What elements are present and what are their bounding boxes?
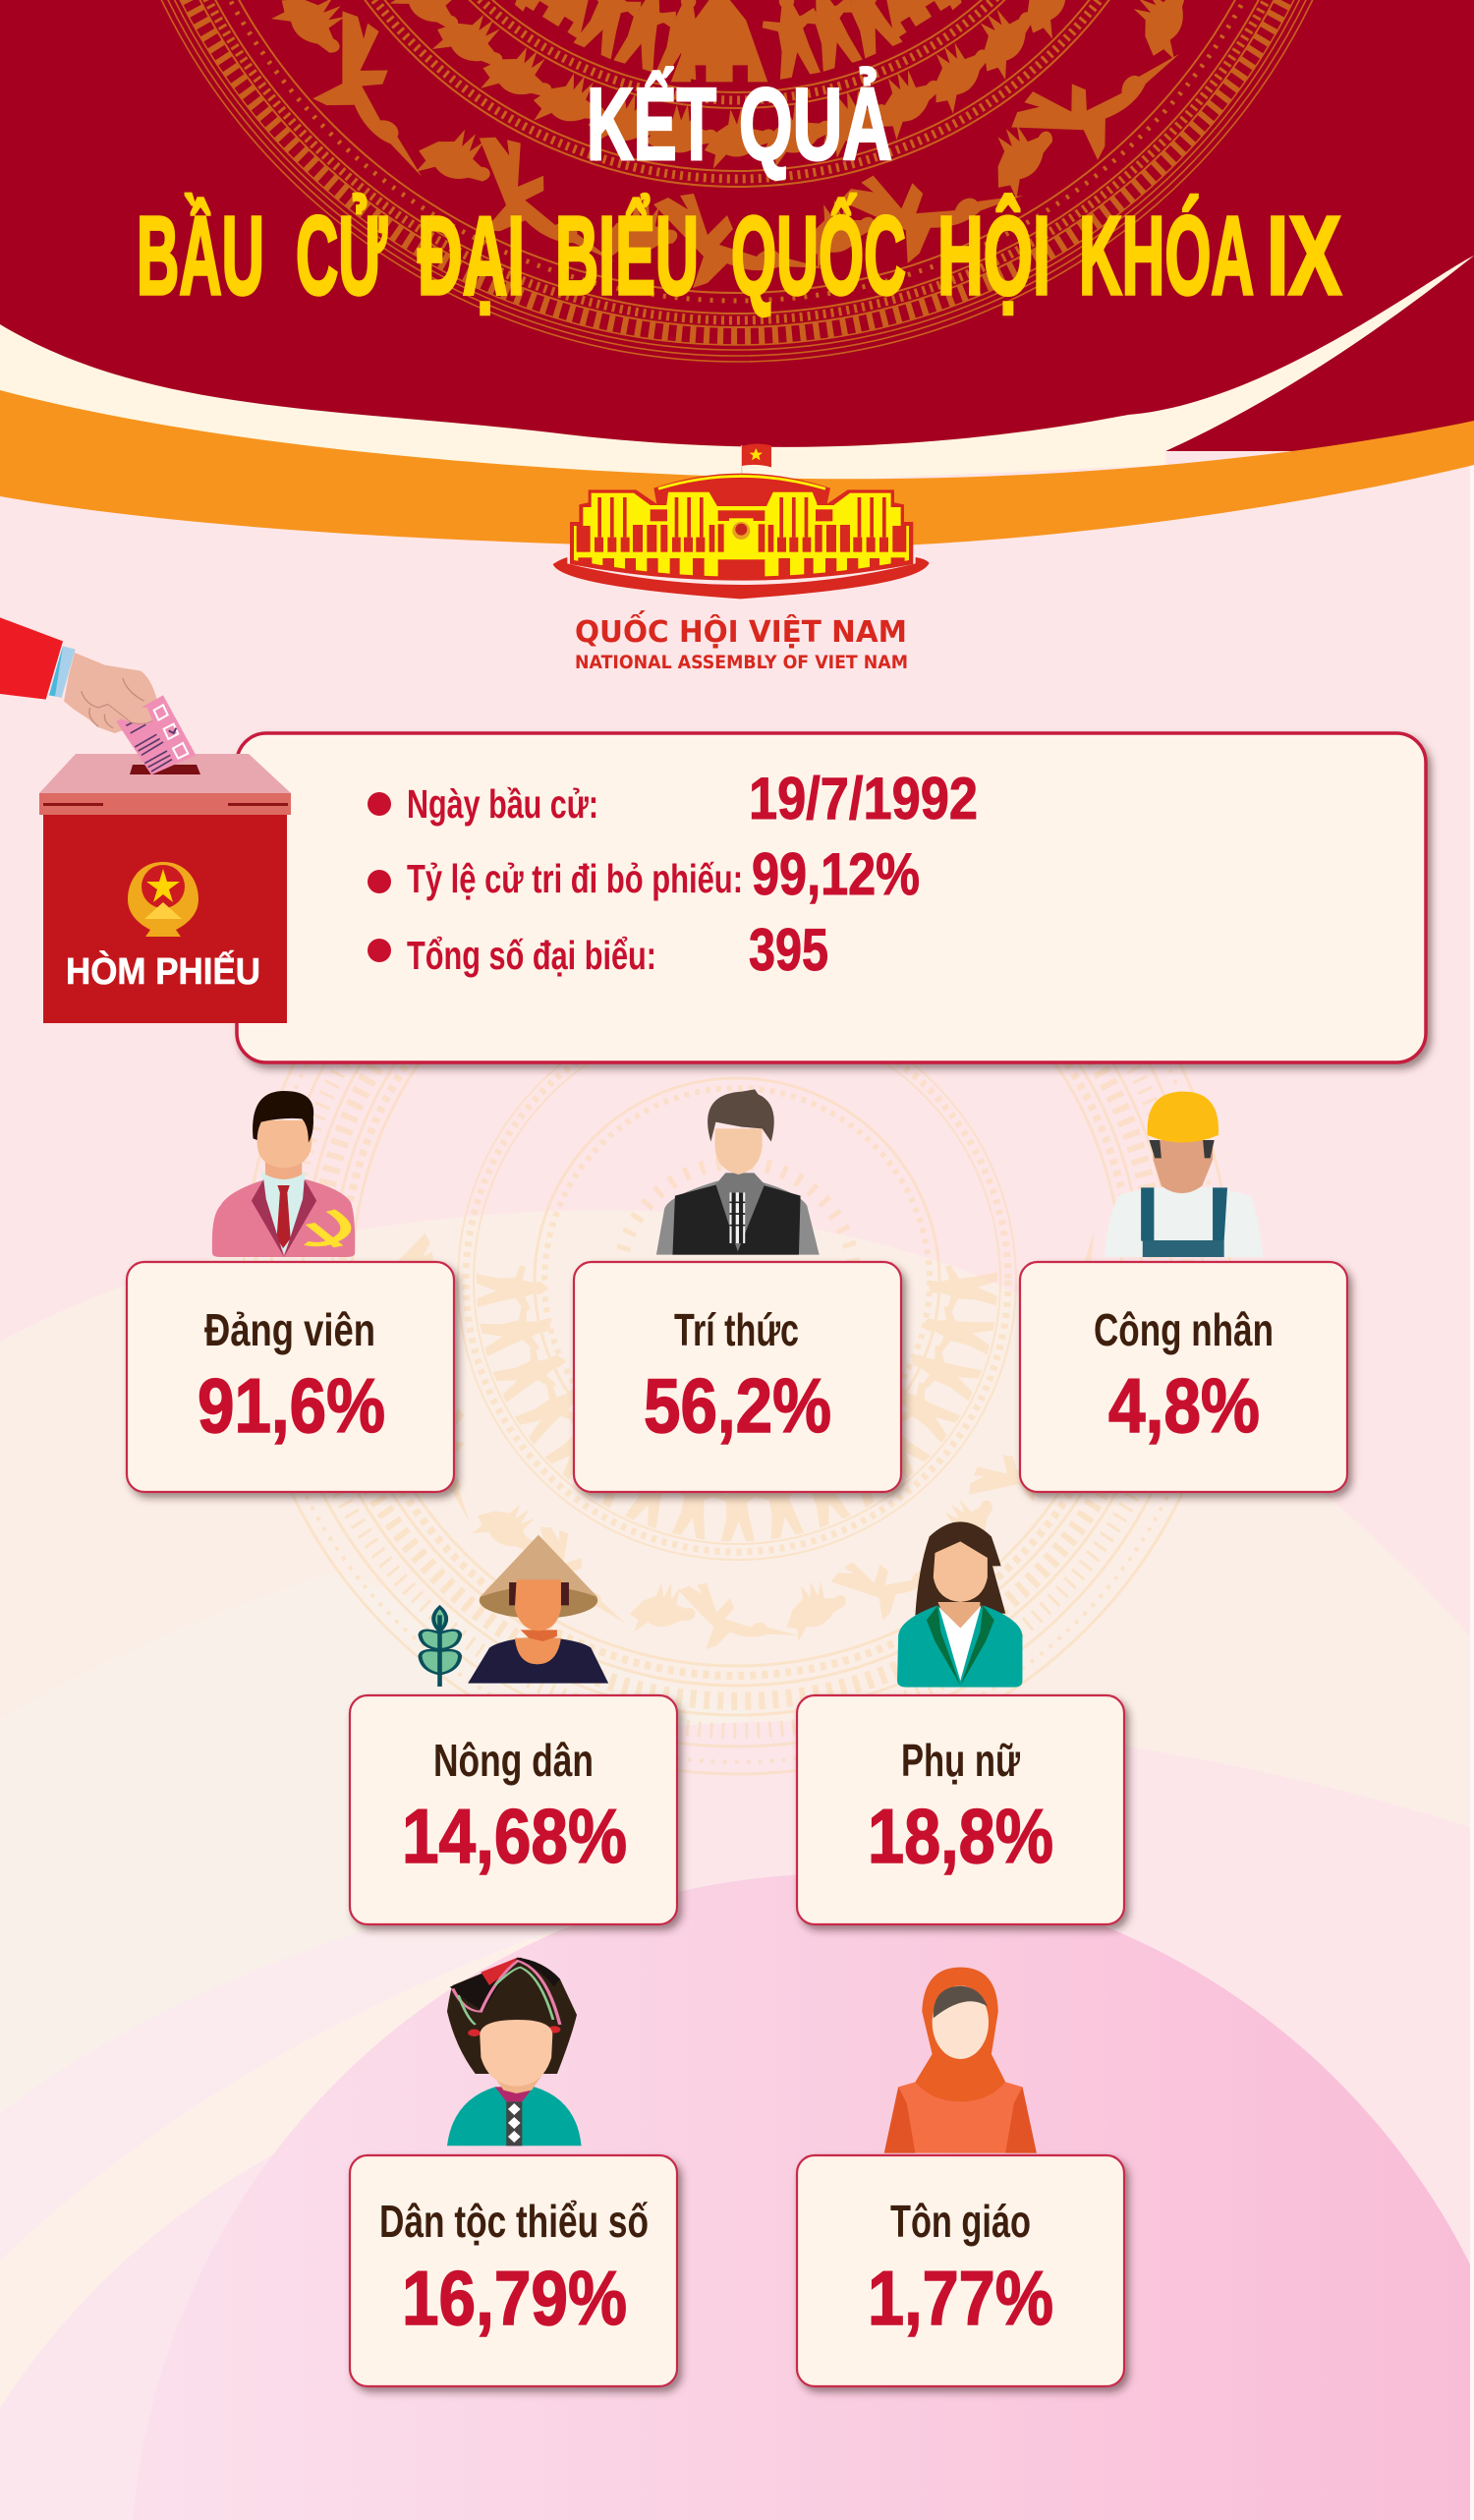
row: total deputies: 395 bbox=[749, 917, 828, 983]
row: election date: Ngày bầu cử: bbox=[407, 781, 598, 827]
title bbox=[137, 68, 1341, 317]
icon: woman bbox=[897, 1521, 1022, 1688]
orange ribbon bbox=[0, 390, 1474, 548]
panel: Tôn giáo bbox=[797, 2155, 1124, 2386]
row: voter turnout: 99,12% bbox=[752, 841, 920, 907]
icon: ballot box with hand bbox=[0, 617, 291, 1023]
icon: religious woman bbox=[884, 1968, 1037, 2153]
panel: Trí thức: 56,2% bbox=[644, 1362, 831, 1449]
title line 2: QUỐC bbox=[731, 194, 906, 317]
icon: ethnic minority woman bbox=[447, 1958, 582, 2146]
row: total deputies bbox=[368, 917, 828, 983]
panel: Nông dân bbox=[350, 1695, 677, 1924]
title line 2: ĐẠI bbox=[418, 194, 525, 317]
title line 2: CỬ bbox=[296, 194, 387, 317]
title line 2: BIỂU bbox=[555, 194, 699, 317]
icon: assembly building bbox=[553, 443, 930, 599]
title line 2: IX bbox=[1267, 194, 1341, 317]
panel: Công nhân bbox=[1020, 1262, 1347, 1492]
title line 1 bbox=[587, 68, 892, 182]
title line 2: BẦU bbox=[137, 194, 264, 317]
panel: Đảng viên: Đảng viên bbox=[204, 1304, 375, 1355]
icon: worker bbox=[1105, 1092, 1263, 1257]
icon: national emblem bbox=[128, 862, 198, 937]
panel: Trí thức bbox=[574, 1262, 901, 1492]
title line 2: HỘI bbox=[937, 194, 1050, 317]
logo text: QUỐC HỘI VIỆT NAM bbox=[575, 609, 907, 650]
watermark: bronze drum bbox=[243, 1064, 1231, 1775]
panel: Trí thức: Trí thức bbox=[674, 1304, 799, 1355]
panel: Dân tộc thiểu số: Dân tộc thiểu số bbox=[379, 2196, 649, 2247]
panel: Nông dân: 14,68% bbox=[402, 1793, 627, 1879]
bronze drum pattern in header bbox=[98, 0, 1376, 362]
row: voter turnout bbox=[368, 841, 920, 907]
panel: Dân tộc thiểu số: 16,79% bbox=[402, 2255, 627, 2341]
panel: Công nhân: Công nhân bbox=[1094, 1304, 1274, 1355]
panel: Tôn giáo: Tôn giáo bbox=[890, 2196, 1031, 2247]
title line 1: KẾT bbox=[587, 68, 716, 182]
row: voter turnout: Tỷ lệ cử tri đi bỏ phiếu: bbox=[407, 856, 743, 901]
title line 2: KHÓA bbox=[1079, 194, 1254, 317]
icon: intellectual bbox=[656, 1089, 820, 1255]
panel: Phụ nữ: Phụ nữ bbox=[901, 1735, 1021, 1786]
icon: hand holding ballot bbox=[0, 617, 196, 774]
row: election date: 19/7/1992 bbox=[749, 766, 978, 831]
row: total deputies: Tổng số đại biểu: bbox=[407, 933, 656, 978]
box label: HÒM PHIẾU bbox=[66, 949, 260, 993]
title line 1: QUẢ bbox=[739, 68, 892, 182]
icon: party member bbox=[212, 1091, 355, 1257]
panel: Công nhân: 4,8% bbox=[1108, 1362, 1260, 1449]
panel: Dân tộc thiểu số bbox=[350, 2155, 677, 2386]
panel: Nông dân: Nông dân bbox=[433, 1735, 594, 1786]
row: election date bbox=[368, 766, 978, 831]
panel: Phụ nữ bbox=[797, 1695, 1124, 1924]
panel: election summary bbox=[237, 733, 1426, 1062]
title line 2 bbox=[137, 194, 1341, 317]
panel: Đảng viên: 91,6% bbox=[198, 1362, 385, 1449]
panel: Phụ nữ: 18,8% bbox=[868, 1793, 1053, 1879]
panel: Đảng viên bbox=[127, 1262, 454, 1492]
logo: National Assembly of Viet Nam: NATIONAL ASSEMBLY OF VIET NAM bbox=[575, 652, 908, 673]
panel: Tôn giáo: 1,77% bbox=[868, 2255, 1053, 2341]
logo: National Assembly of Viet Nam bbox=[553, 443, 930, 673]
icon: farmer bbox=[420, 1535, 608, 1687]
